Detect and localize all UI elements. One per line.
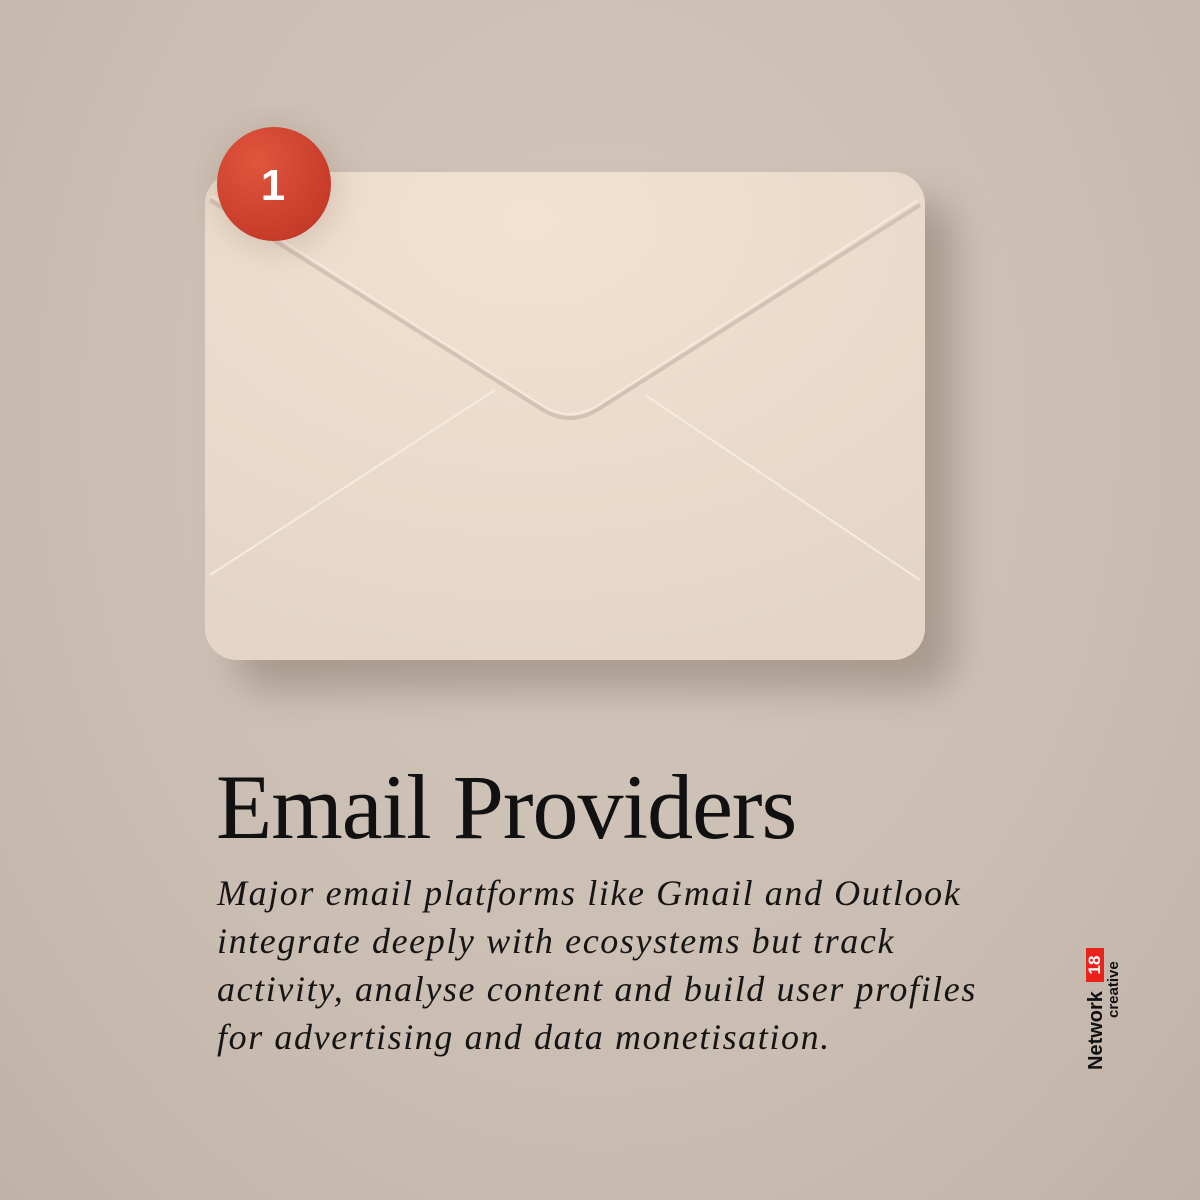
envelope body — [205, 172, 925, 660]
notification badge: 1 — [261, 161, 285, 210]
notification badge — [217, 127, 334, 246]
envelope illustration — [205, 124, 968, 704]
envelope fold lines — [210, 390, 920, 580]
body text: Major email platforms like Gmail and Outlook — [217, 873, 961, 913]
body text: activity, analyse content and build user profiles — [217, 969, 977, 1009]
logo: Network18 creative: creative — [1105, 961, 1122, 1018]
logo: Network18 creative: Network — [1085, 991, 1107, 1070]
body text: for advertising and data monetisation. — [217, 1017, 831, 1057]
body text: integrate deeply with ecosystems but track — [217, 921, 895, 961]
envelope flap — [210, 200, 920, 418]
logo: Network18 creative: 18 — [1085, 956, 1104, 974]
title: Email Providers — [216, 756, 796, 858]
logo: Network18 creative — [1085, 948, 1122, 1070]
body text — [216, 873, 977, 1057]
envelope shadow — [235, 200, 955, 690]
